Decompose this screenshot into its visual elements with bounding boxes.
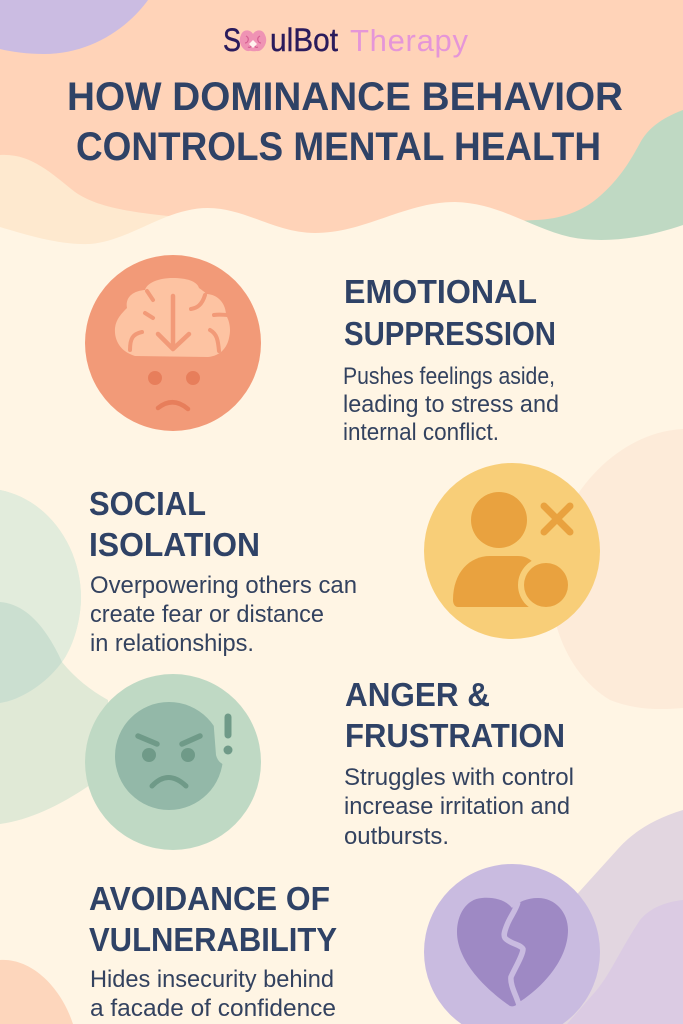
icon: isolated person with X [424, 463, 600, 639]
brain [115, 278, 230, 357]
notch [213, 712, 232, 765]
logo [223, 22, 468, 58]
section: emotional suppression: internal conflict. [343, 419, 499, 446]
light yellow left wave [0, 155, 178, 255]
section: emotional suppression: leading to stress and [343, 391, 559, 418]
logo wordmark: SoulBot [223, 22, 338, 58]
section: social isolation: ISOLATION [89, 526, 260, 563]
section: anger and frustration: outbursts. [344, 823, 449, 850]
head [471, 492, 527, 548]
title [67, 75, 623, 169]
brain folds [130, 291, 227, 351]
section: avoidance of vulnerability: Hides insecurity behind [90, 966, 334, 993]
cream wave [0, 202, 683, 270]
body [453, 556, 540, 607]
face [115, 702, 223, 810]
section: emotional suppression [343, 273, 559, 446]
right peach blob [550, 429, 683, 709]
frown [158, 402, 188, 409]
section: anger and frustration [344, 676, 574, 850]
section: avoidance of vulnerability: VULNERABILITY [89, 921, 337, 958]
section: emotional suppression: Pushes feelings aside, [343, 363, 555, 390]
section: anger and frustration: increase irritation and [344, 793, 570, 820]
heart [457, 898, 568, 1006]
left green blobs [0, 490, 108, 824]
icon: brain with down arrow and sad face [85, 255, 261, 431]
icon: broken heart [424, 864, 600, 1024]
section: anger and frustration: Struggles with control [344, 764, 574, 791]
section: anger and frustration: FRUSTRATION [345, 717, 565, 754]
eyes [142, 748, 156, 762]
logo wordmark: SoulBot: o [244, 22, 264, 58]
arrow [158, 296, 189, 349]
title: CONTROLS MENTAL HEALTH [76, 125, 601, 169]
section: anger and frustration: ANGER & [345, 676, 490, 713]
section: avoidance of vulnerability: AVOIDANCE OF [89, 880, 330, 917]
frown [152, 778, 186, 786]
icon: logo brain [240, 30, 266, 51]
lavender corner blob [0, 0, 148, 54]
logo wordmark: Therapy: Therapy [350, 23, 468, 58]
section: social isolation: Overpowering others can [90, 572, 357, 599]
section: social isolation: create fear or distance [90, 601, 324, 628]
icon: angry face [85, 674, 261, 850]
section: avoidance of vulnerability: a facade of confidence [90, 995, 336, 1022]
logo wordmark: SoulBot: ulBot [270, 22, 338, 58]
header peach wave [0, 0, 683, 245]
title: HOW DOMINANCE BEHAVIOR [67, 75, 623, 119]
section: avoidance of vulnerability [89, 880, 337, 1022]
brows [138, 736, 200, 744]
section: social isolation [89, 485, 357, 657]
bottom right purple blobs [560, 810, 683, 1024]
x mark [544, 506, 570, 532]
section: social isolation: in relationships. [90, 630, 254, 657]
section: emotional suppression: SUPPRESSION [344, 315, 556, 352]
companion ring [518, 557, 574, 613]
eyes [148, 371, 162, 385]
section: emotional suppression: EMOTIONAL [344, 273, 537, 310]
section: social isolation: SOCIAL [89, 485, 206, 522]
exclamation mark [224, 717, 232, 735]
bottom left peach blob [0, 960, 73, 1024]
crack [504, 902, 523, 1005]
green right blob [500, 110, 683, 250]
companion [524, 563, 568, 607]
logo wordmark: SoulBot: S [223, 22, 241, 58]
